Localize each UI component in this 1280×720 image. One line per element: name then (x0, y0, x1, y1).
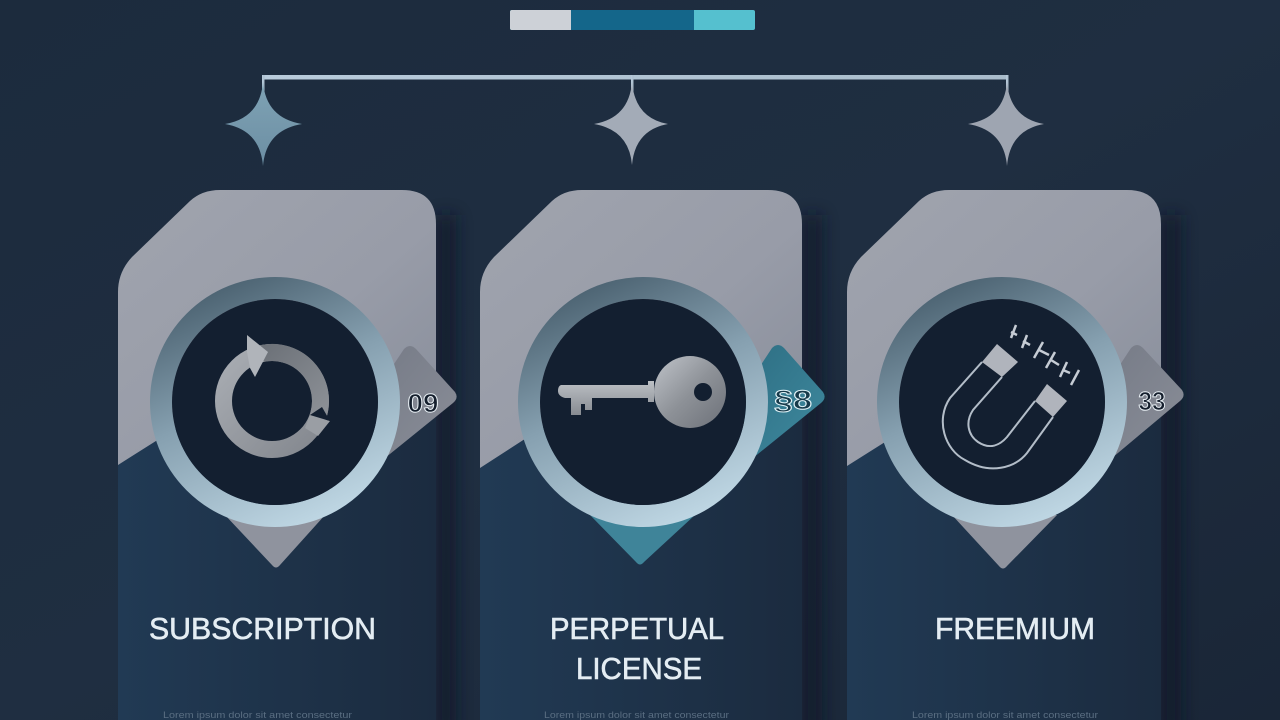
ring (161, 288, 389, 516)
bottom pointer (590, 515, 695, 564)
side tab: 33 (1138, 386, 1166, 416)
side tab (738, 345, 825, 458)
heading: perpetual license (550, 611, 724, 686)
icon: magnet (943, 325, 1079, 468)
ring centre (172, 299, 378, 505)
heading: freemium: FREEMIUM (935, 611, 1095, 646)
card upper section (847, 190, 1161, 466)
star: subscription (225, 82, 302, 166)
heading: perpetual license: PERPETUAL (550, 611, 724, 646)
icon: key (558, 356, 726, 428)
card upper section (118, 190, 436, 465)
heading: perpetual license: LICENSE (576, 651, 702, 686)
side tab: §8 (774, 385, 812, 415)
caption: freemium: Lorem ipsum dolor sit amet consectetur (912, 710, 1098, 720)
star: freemium (968, 82, 1044, 166)
ring (529, 288, 757, 516)
ring centre (540, 299, 746, 505)
star: perpetual license (594, 82, 668, 165)
card lower section (480, 380, 802, 720)
side tab (370, 346, 457, 458)
card lower section (847, 380, 1161, 720)
icon: renewal arrows (224, 335, 330, 450)
ring centre (899, 299, 1105, 505)
ring (888, 288, 1116, 516)
card lower section (118, 380, 436, 720)
top colour bar (510, 10, 755, 30)
side tab: 09 (408, 388, 438, 418)
heading: subscription: SUBSCRIPTION (149, 611, 376, 646)
bottom pointer (225, 515, 325, 568)
panel: freemium (847, 190, 1184, 720)
bottom pointer (952, 515, 1057, 568)
card upper section (480, 190, 802, 468)
panel: subscription (118, 190, 457, 720)
side tab (1097, 345, 1184, 458)
panel: perpetual license (480, 190, 825, 720)
caption: perpetual license: Lorem ipsum dolor sit amet consectetur (544, 710, 729, 720)
connector bracket (262, 75, 1008, 95)
caption: subscription: Lorem ipsum dolor sit amet consectetur (163, 710, 352, 720)
